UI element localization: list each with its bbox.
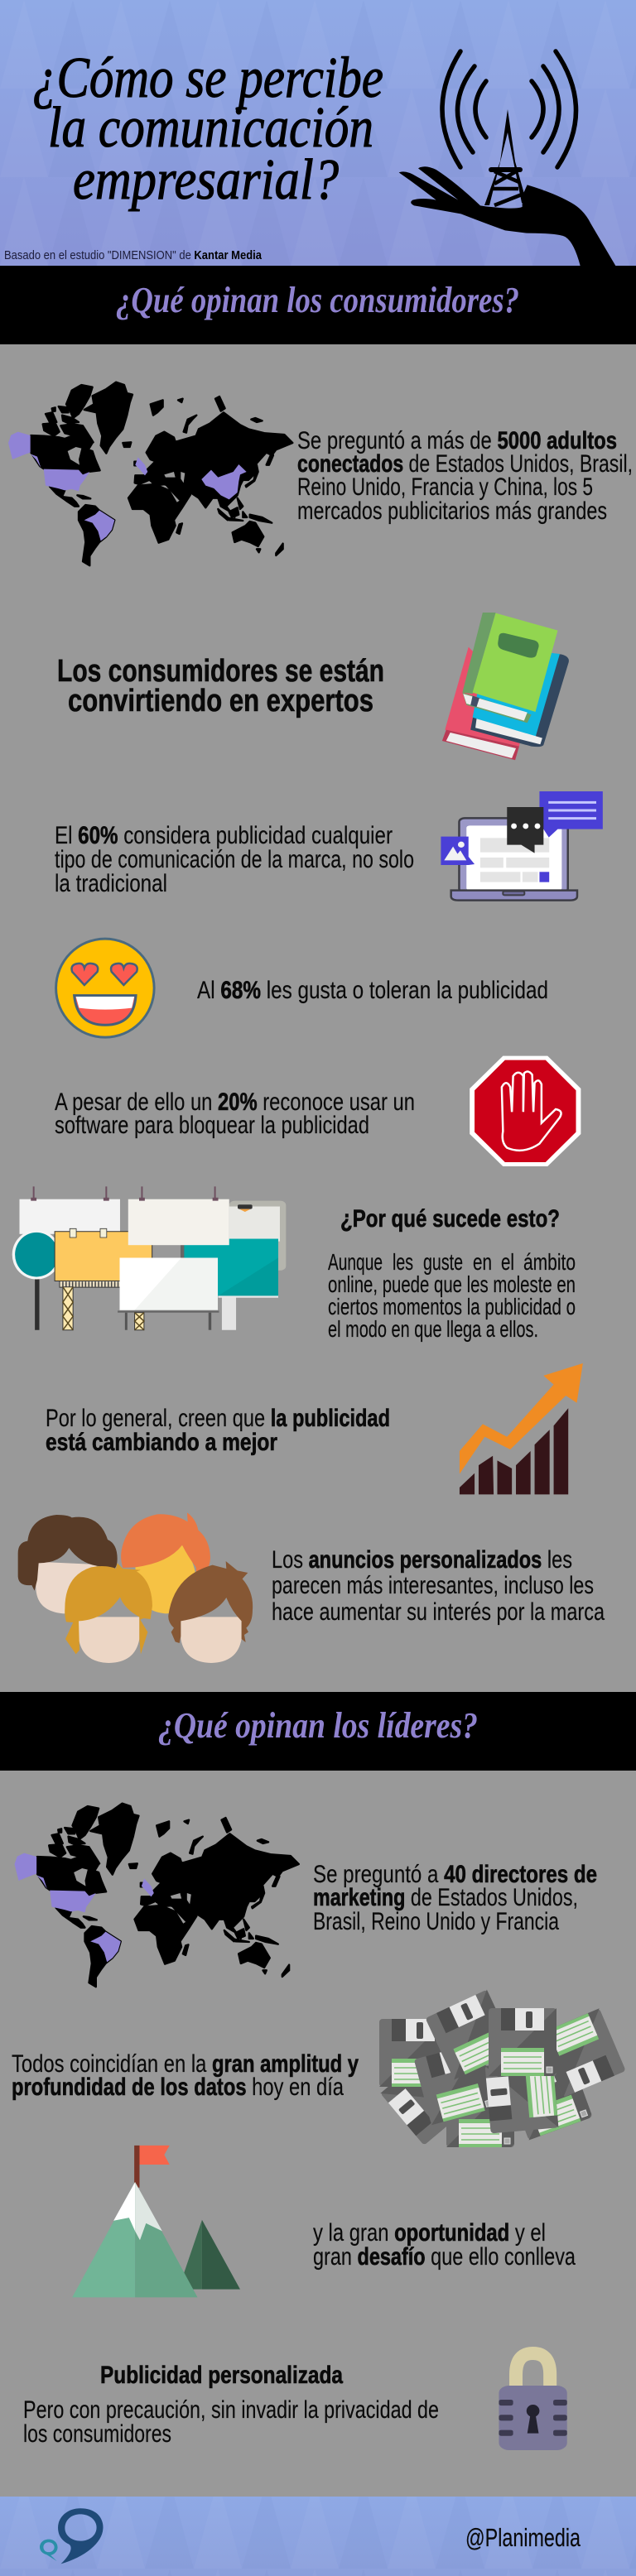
- text: 60%: El 60% considera publicidad cualquier: [55, 822, 393, 849]
- person: dark brown hair: [18, 1515, 118, 1613]
- heading: consumers are becoming experts: convirtiendo en expertos: [68, 684, 373, 718]
- text: explanation paragraph: Aunque: [328, 1249, 383, 1275]
- text: opportunity and challenge: [313, 2219, 576, 2271]
- text: 60%: tipo de comunicación de la marca, no solo: [55, 846, 414, 873]
- subheading: why does this happen: ¿Por qué sucede esto?: [340, 1205, 560, 1233]
- icon: padlock: [499, 2353, 567, 2450]
- footer panel: [0, 2497, 636, 2576]
- heading: ¿Qué opinan los consumidores?: [116, 280, 519, 320]
- text: breadth of data: [12, 2050, 359, 2101]
- text: opportunity and challenge: gran desafío que ello conlleva: [313, 2243, 576, 2271]
- title: empresarial?: [73, 148, 339, 212]
- heading: consumers are becoming experts: [57, 654, 384, 718]
- person: brown hair: [168, 1561, 253, 1663]
- text: 60%: [55, 822, 414, 897]
- title: [32, 46, 383, 212]
- text: survey of consumers: Se preguntó a más de 5000 adultos: [297, 427, 617, 454]
- text: privacy caution: Pero con precaución, sin invadir la privacidad de: [23, 2396, 439, 2424]
- text: survey of consumers: [297, 427, 633, 525]
- text: survey of leaders: [313, 1861, 597, 1935]
- icon: growth chart with arrow: [460, 1363, 583, 1494]
- text: survey of leaders: marketing de Estados Unidos,: [313, 1884, 578, 1911]
- header panel: [0, 0, 636, 266]
- icon: pile of floppy disks: [379, 1990, 626, 2147]
- text: explanation paragraph: ámbito: [523, 1249, 576, 1275]
- text: explanation paragraph: en: [473, 1249, 492, 1275]
- handle: @Planimedia: [465, 2523, 581, 2552]
- world map: consumers: [8, 382, 292, 565]
- text: breadth of data: profundidad de los datos hoy en día: [12, 2074, 344, 2101]
- text: explanation paragraph: les: [393, 1249, 413, 1275]
- logo: Planimedia speech rings: [40, 2508, 103, 2564]
- icon: laptop with chat bubbles: [441, 791, 603, 901]
- source caption: Basado en el estudio "DIMENSION" de Kantar Media: [4, 248, 263, 262]
- text: breadth of data: Todos coincidían en la gran amplitud y: [12, 2050, 359, 2078]
- section band: líderes: [0, 1692, 636, 1771]
- illustration: group of people: [18, 1512, 253, 1663]
- text: advertising is improving: [46, 1405, 390, 1456]
- text: 20%: [55, 1089, 415, 1139]
- world map: leaders: [14, 1804, 299, 1987]
- person: golden hair: [65, 1563, 152, 1663]
- text: explanation paragraph: [328, 1249, 576, 1342]
- icon: stack of books: [442, 613, 569, 760]
- text: explanation paragraph: guste: [423, 1249, 463, 1275]
- icon: hand holding antenna: [399, 51, 615, 266]
- icon: smiling face with heart eyes: [55, 938, 156, 1039]
- title: la comunicación: [48, 96, 373, 160]
- text: opportunity and challenge: y la gran oportunidad y el: [313, 2219, 546, 2247]
- person: orange hair: [121, 1512, 210, 1613]
- icon: stop sign with hand: [470, 1056, 581, 1166]
- illustration: billboards: [12, 1186, 286, 1330]
- text: personalised ads: Los anuncios personalizados les: [272, 1546, 572, 1574]
- text: personalised ads: [272, 1546, 605, 1626]
- text: privacy caution: los consumidores: [23, 2420, 171, 2448]
- text: survey of leaders: Se preguntó a 40 directores de: [313, 1861, 597, 1888]
- text: 20%: software para bloquear la publicidad: [55, 1112, 369, 1139]
- text: advertising is improving: está cambiando a mejor: [46, 1429, 277, 1456]
- text: 60%: la tradicional: [55, 870, 167, 897]
- icon: mountain with flag: [72, 2146, 240, 2297]
- text: 68%: Al 68% les gusta o toleran la publicidad: [197, 977, 548, 1004]
- title: ¿Cómo se percibe: [32, 46, 383, 110]
- heading: ¿Qué opinan los líderes?: [158, 1705, 478, 1746]
- text: 20%: A pesar de ello un 20% reconoce usar un: [55, 1089, 415, 1116]
- heading: consumers are becoming experts: Los consumidores se están: [57, 654, 384, 689]
- section band: consumidores: [0, 266, 636, 344]
- text: advertising is improving: Por lo general, creen que la publicidad: [46, 1405, 390, 1432]
- subheading: personalised advertising: Publicidad personalizada: [100, 2362, 343, 2389]
- text: explanation paragraph: el modo en que llega a ellos.: [328, 1316, 538, 1342]
- text: privacy caution: [23, 2396, 439, 2448]
- text: explanation paragraph: el: [501, 1249, 514, 1275]
- text: survey of leaders: Brasil, Reino Unido y Francia: [313, 1908, 559, 1935]
